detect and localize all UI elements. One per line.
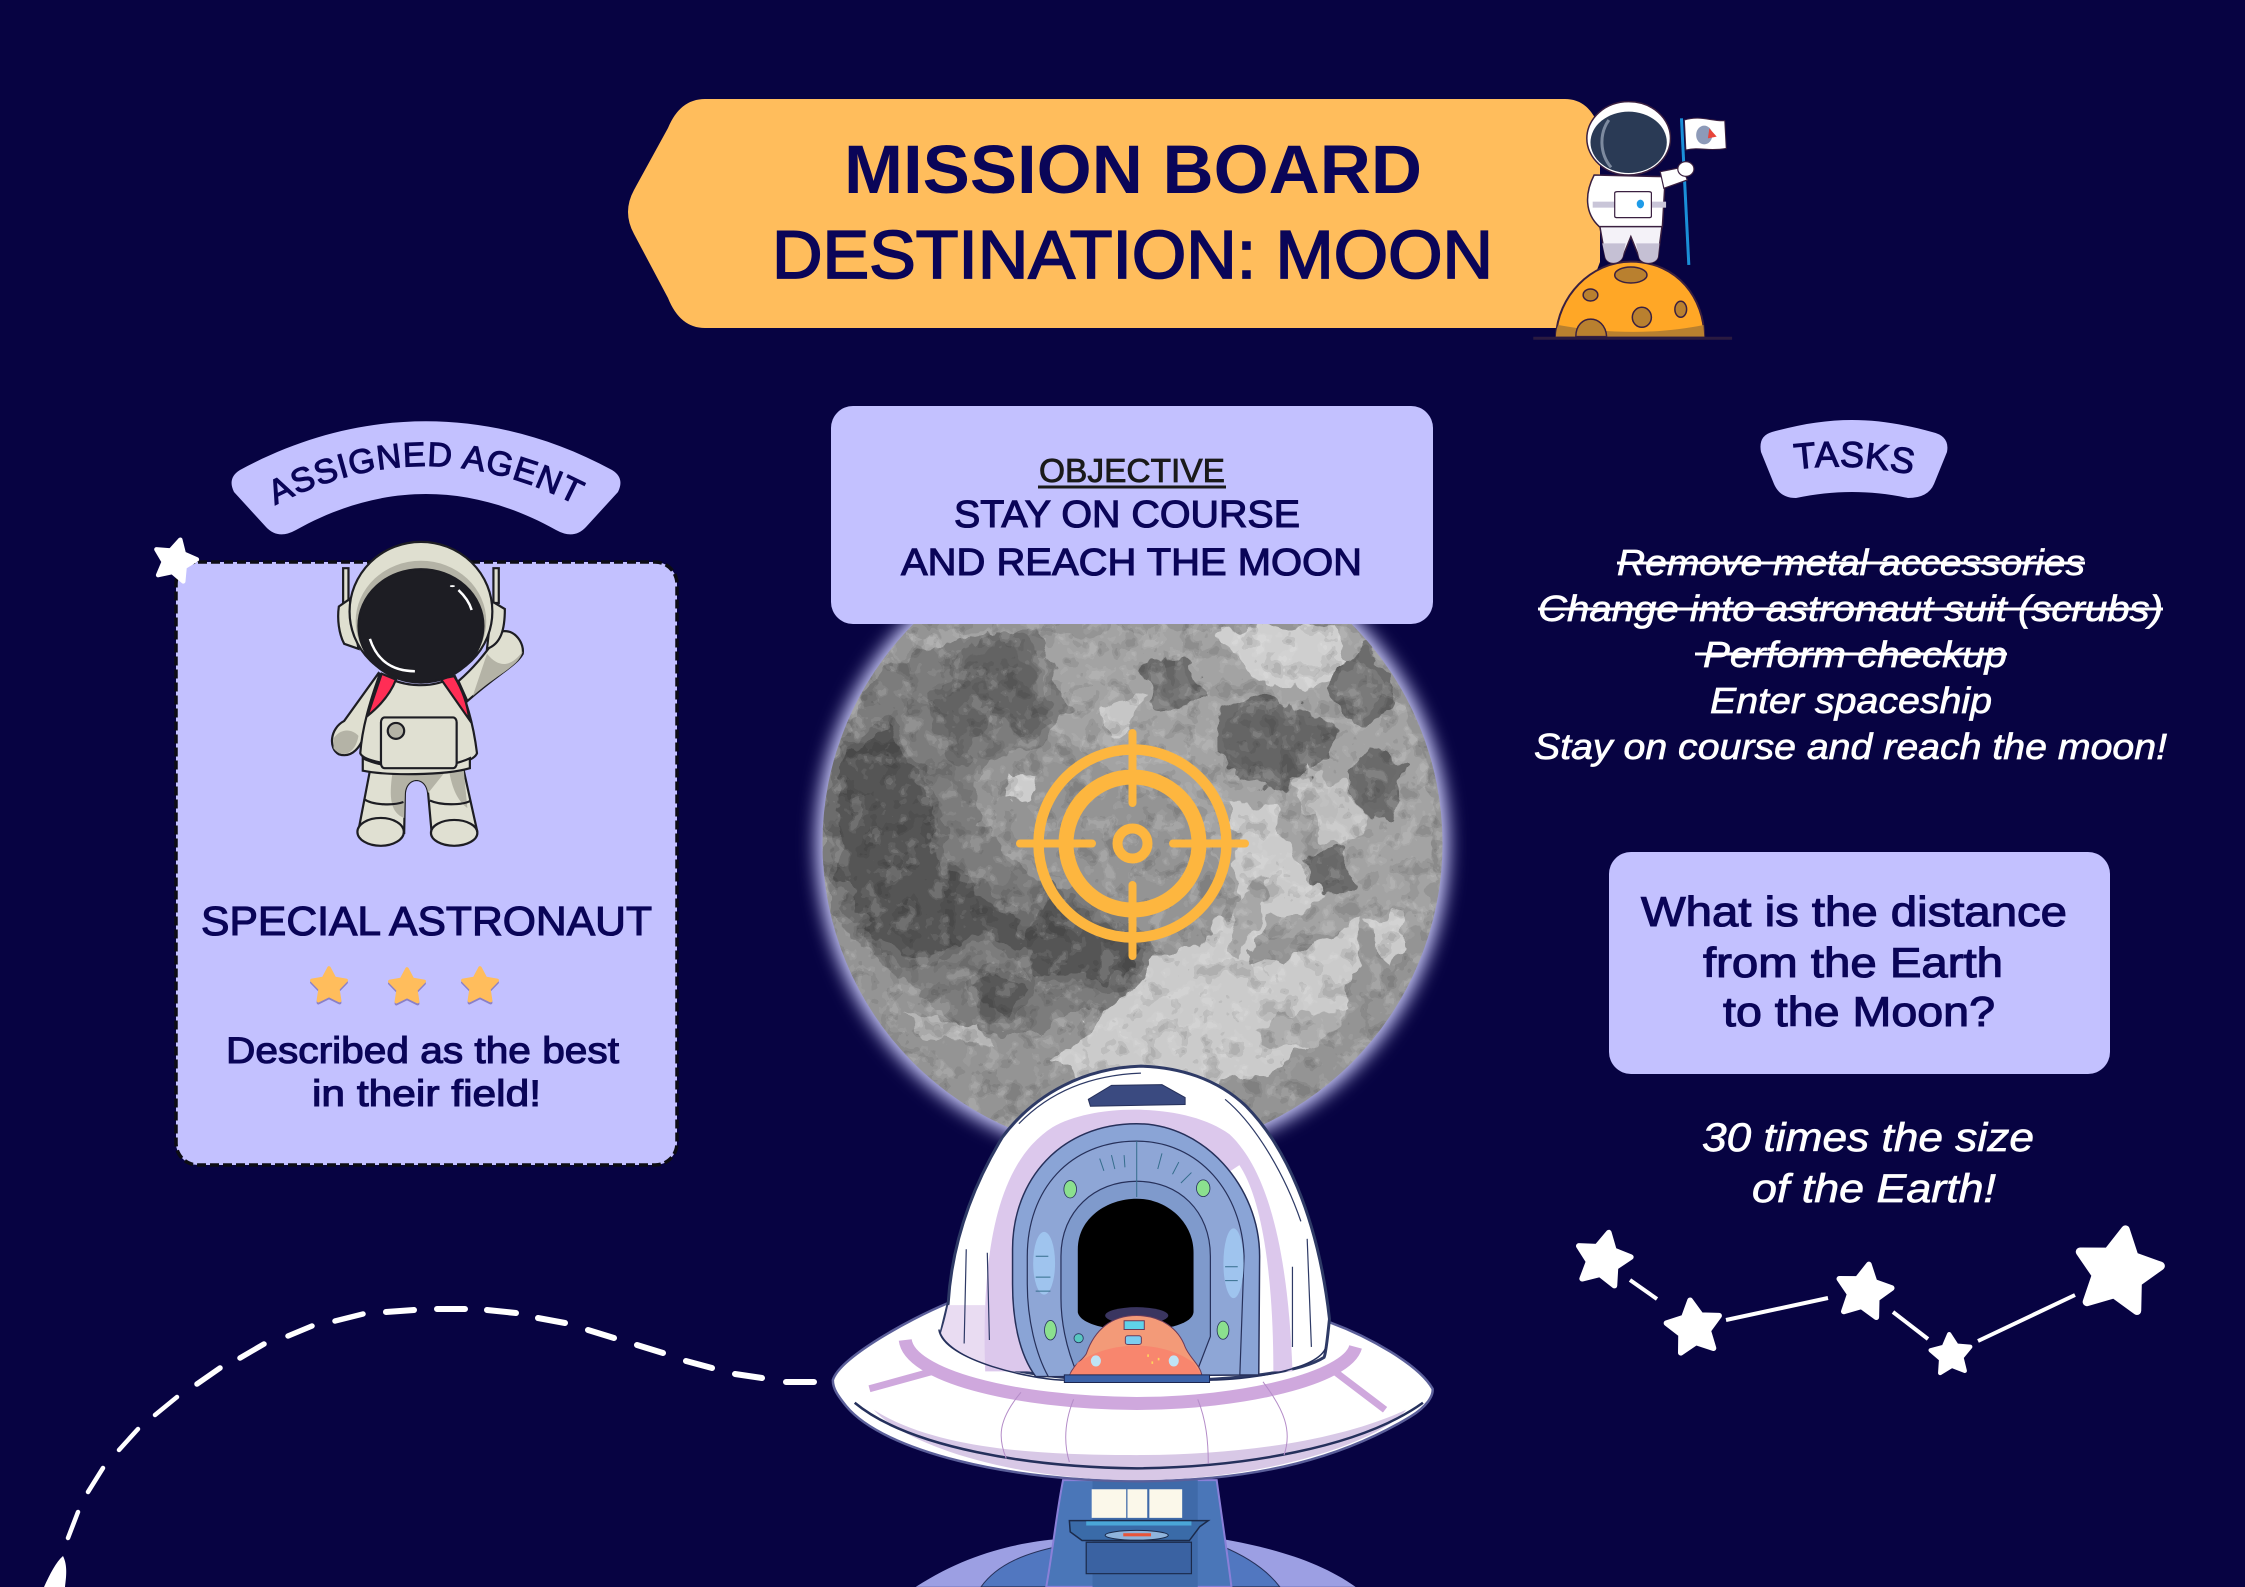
agent description (226, 1030, 620, 1114)
path tail (44, 1556, 66, 1587)
panel: distance question: What is the distance (1641, 888, 2067, 935)
moon with glow (802, 624, 1464, 1144)
icon: target crosshair (1020, 733, 1245, 956)
icon: spaceship (833, 1066, 1433, 1587)
heading badge: assigned agent (232, 421, 620, 534)
agent description: Described as the best (226, 1030, 620, 1071)
door lights (1045, 1180, 1229, 1343)
agent description: in their field! (312, 1073, 541, 1114)
dashed flight path (44, 1309, 814, 1587)
objective text (901, 494, 1362, 584)
agent title: SPECIAL ASTRONAUT (201, 898, 652, 944)
objective text: AND REACH THE MOON (901, 542, 1362, 584)
ship saucer (833, 1303, 1433, 1481)
subtitle: destination moon: DESTINATION: MOON (772, 217, 1493, 293)
answer text: of the Earth! (1752, 1167, 1996, 1211)
heading badge: tasks (1760, 420, 1948, 498)
task list: Remove metal accessories (1617, 542, 2085, 583)
task list: Change into astronaut suit (scrubs) (1538, 588, 2163, 629)
dome rim line (939, 1330, 1326, 1380)
icon: white star on card corner (150, 535, 201, 583)
answer text (1702, 1116, 2034, 1211)
ship dome (941, 1066, 1329, 1381)
small moon (1533, 262, 1732, 338)
heading badge: assigned agent: ASSIGNED AGENT (273, 442, 586, 506)
panel: objective (831, 406, 1433, 624)
panel: distance question (1609, 852, 2110, 1074)
panel: distance question: from the Earth (1703, 939, 2003, 986)
mid-grey western underlay (821, 628, 1162, 1035)
small astronaut figure (1587, 102, 1694, 263)
icon: waving astronaut (332, 542, 523, 846)
panel: assigned agent card (150, 535, 677, 1165)
ship door arch (1013, 1124, 1260, 1377)
orange pod (1064, 1307, 1210, 1383)
answer text: 30 times the size (1702, 1116, 2034, 1160)
objective text: STAY ON COURSE (954, 494, 1300, 536)
task list: Enter spaceship (1710, 680, 1992, 721)
objective label: OBJECTIVE (1039, 452, 1225, 489)
ship dark doorway (1078, 1199, 1194, 1330)
task list (1534, 542, 2167, 767)
task list: Perform checkup (1703, 634, 2007, 675)
dark maria (829, 630, 1398, 1020)
panel: distance question: to the Moon? (1723, 988, 1995, 1035)
rating stars (312, 968, 497, 1004)
heading badge: tasks: TASKS (1792, 441, 1914, 474)
title banner (628, 99, 1600, 328)
task list: Stay on course and reach the moon! (1534, 726, 2167, 767)
title: mission board: MISSION BOARD (844, 131, 1422, 208)
icon: astronaut with flag on small moon (1533, 102, 1732, 338)
light highlands lower right (1053, 802, 1364, 1088)
icon: star constellation (1572, 1223, 2166, 1374)
flag (1681, 118, 1726, 265)
upper lighter terrain (909, 628, 1431, 933)
ship stand (916, 1480, 1356, 1587)
